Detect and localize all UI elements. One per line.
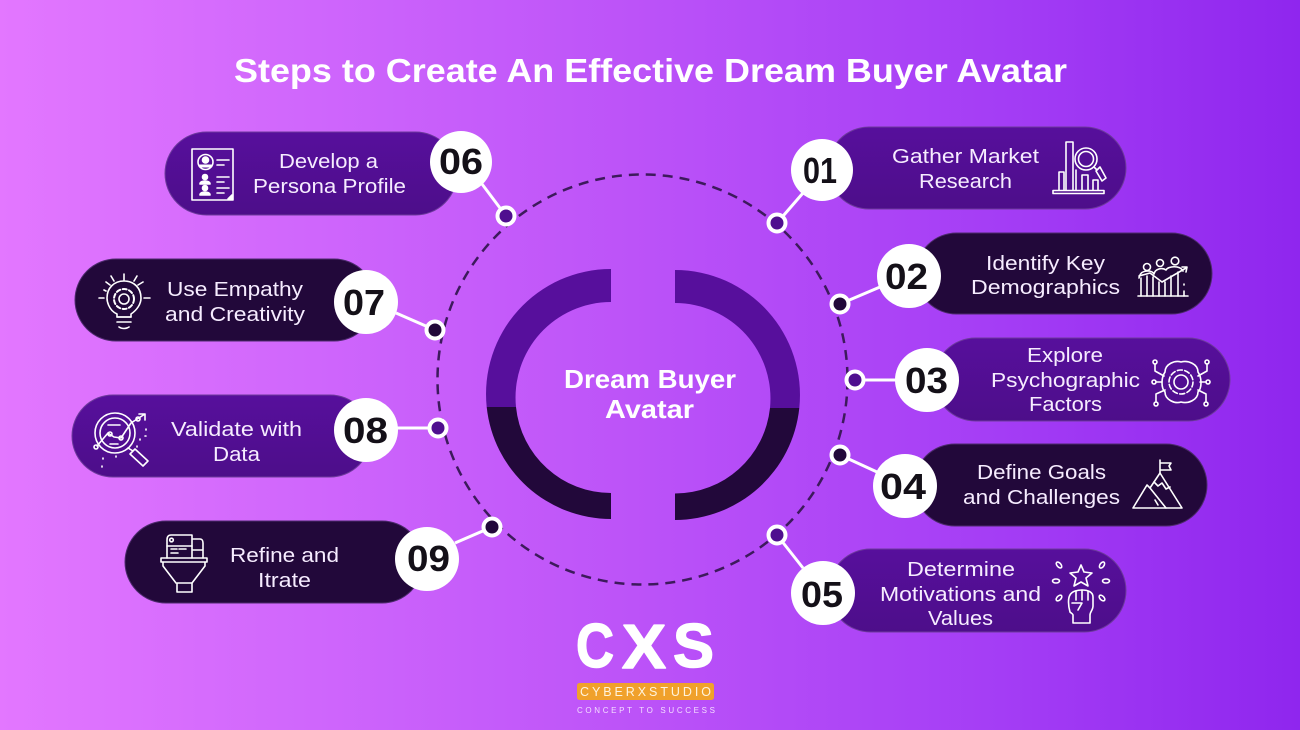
step 07 [75,259,444,341]
step 09: Itrate [258,569,311,592]
step 01 [768,127,1126,232]
central split ring [486,269,800,520]
step 06: Persona Profile [253,175,406,198]
step 08: 08 [343,410,388,451]
title: Steps to Create An Effective Dream Buyer Avatar [234,52,1067,89]
step 09: Refine and [230,544,339,567]
step 05: Values [928,607,993,630]
step 06: Develop a [279,150,379,173]
dashed orbit ring [438,174,848,584]
step 03 [846,338,1230,421]
step 05 [768,526,1126,632]
step 06: 06 [439,141,483,182]
logo wordmark [576,612,714,682]
icon: magnifier with data [94,413,148,467]
center label: Avatar [605,394,694,424]
step 04: and Challenges [963,486,1120,509]
logo: CyberXStudio: CYBERXSTUDIO [580,685,711,699]
icon: mountain flag [1133,460,1182,508]
step 09 [125,518,500,603]
step 08: Validate with [171,418,302,441]
step 04: Define Goals [977,461,1106,484]
step 08 [72,395,446,477]
logo wordmark: X [622,613,666,682]
step 05: Determine [907,558,1015,581]
step 02: 02 [885,256,928,297]
step 03: 03 [905,360,948,401]
step 05: Motivations and [880,583,1041,606]
logo: CyberXStudio [576,612,715,715]
icon: psychographic brain gear [1152,360,1210,406]
step 08: Data [213,443,261,466]
step 01: 01 [803,150,837,191]
step 02: Identify Key [986,252,1106,275]
step 07: Use Empathy [167,278,304,301]
logo wordmark: C [576,612,614,681]
icon: persona document [192,149,233,200]
step 06 [165,131,514,224]
icon: lightbulb gear [99,274,150,328]
logo: CyberXStudio: CONCEPT TO SUCCESS [577,706,715,715]
step 04 [832,444,1207,526]
step 03: Explore [1027,344,1103,367]
step 02 [832,233,1212,314]
step 05: 05 [801,574,843,615]
step 09: 09 [407,538,450,579]
step 03: Factors [1029,393,1102,416]
step 01: Research [919,170,1012,193]
step 07: 07 [343,282,385,323]
center label [564,364,736,424]
logo wordmark: S [673,612,714,681]
icon: star and fist [1052,561,1110,623]
icon: refinement funnel [161,535,207,592]
step 01: Gather Market [892,145,1039,168]
step 02: Demographics [971,276,1120,299]
center label: Dream Buyer [564,364,736,394]
step 07: and Creativity [165,303,306,326]
step 04: 04 [880,466,926,507]
icon: demographics people [1138,257,1188,296]
icon: market research chart [1053,142,1106,194]
step 03: Psychographic [991,369,1140,392]
